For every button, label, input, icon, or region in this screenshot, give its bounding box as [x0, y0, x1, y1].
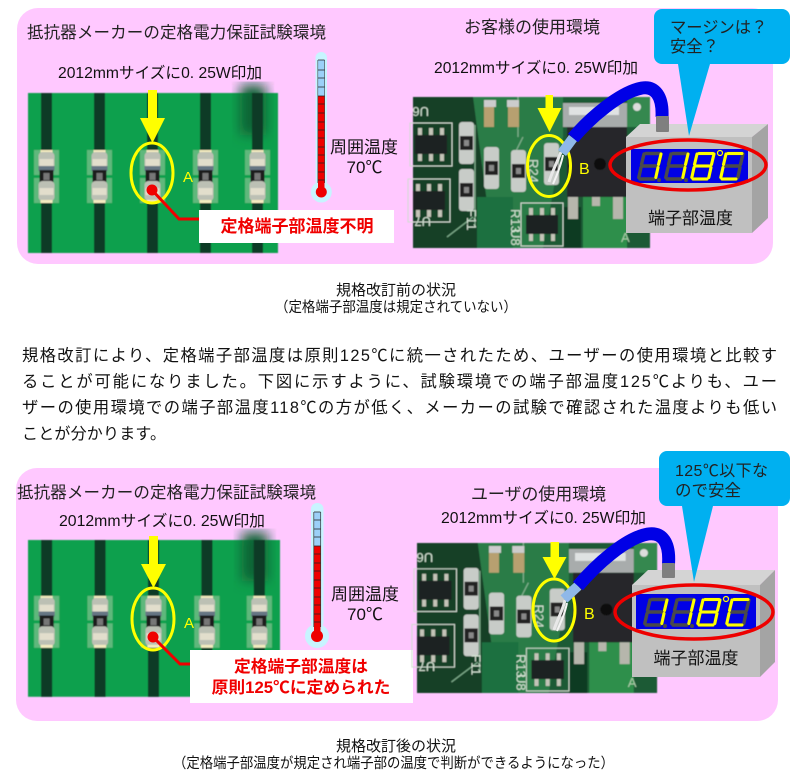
- label: terminal temperature: 端子部温度: [654, 649, 738, 668]
- leader: red terminal marker: [148, 632, 192, 664]
- caption: after revision: （定格端子部温度が規定され端子部の温度で判断ができるようになった）: [173, 755, 614, 772]
- seven-segment readout: [639, 150, 743, 182]
- caption: after revision: [173, 738, 614, 772]
- caption: before revision: 規格改訂前の状況: [336, 282, 456, 299]
- highlight: resistor B ellipse: [528, 136, 570, 196]
- callout: margin question: [654, 9, 790, 136]
- text block: explanation: ることが可能になりました。下図に示すように、試験環境での端子部温度125℃よりも、ユー: [22, 373, 777, 391]
- caption: before revision: [275, 282, 517, 316]
- photo: resistors on green board: [28, 85, 278, 253]
- arrow: yellow power arrow: [141, 536, 166, 588]
- caption: after revision: 規格改訂後の状況: [336, 738, 456, 755]
- highlight: resistor A ellipse: [131, 143, 173, 203]
- callout: rated terminal temperature: 定格端子部温度は: [234, 657, 368, 676]
- caption: before revision: （定格端子部温度は規定されていない）: [275, 299, 517, 316]
- callout: rated terminal temperature: 原則125℃に定められた: [212, 678, 390, 697]
- panel: after revision: [16, 468, 778, 721]
- text: applied power condition: 2012mmサイズに0. 25W印加: [441, 509, 646, 527]
- probe: blue sensor cable: [554, 534, 675, 631]
- seven-segment readout: [645, 596, 749, 628]
- callout: safe below 125 degrees: ので安全: [675, 481, 741, 500]
- label: B: B: [584, 606, 595, 623]
- measurement device: [615, 570, 775, 677]
- photo: dense circuit board: [412, 543, 657, 693]
- callout: safe below 125 degrees: 125℃以下な: [675, 462, 768, 480]
- label: B: B: [579, 161, 590, 178]
- callout: margin question: マージンは？: [670, 19, 767, 37]
- highlight: resistor A ellipse: [132, 588, 174, 650]
- heading: customer environment: お客様の使用環境: [464, 17, 600, 37]
- panel: before revision: [17, 8, 773, 264]
- arrow: yellow power arrow: [140, 90, 165, 143]
- text block: explanation: 規格改訂により、定格端子部温度は原則125℃に統一されたため、ユーザーの使用環境と比較す: [22, 347, 777, 365]
- label: terminal temperature: 端子部温度: [648, 209, 733, 228]
- leader: red terminal marker: [146, 184, 199, 219]
- text block: explanation: ことが分かります。: [22, 425, 166, 443]
- highlight: resistor B ellipse: [533, 579, 575, 641]
- label: ambient temperature: 周囲温度: [330, 138, 398, 157]
- probe: blue sensor cable: [549, 88, 669, 184]
- highlight: readout ellipse: [610, 140, 766, 190]
- callout: terminal temperature unknown: 定格端子部温度不明: [220, 217, 374, 236]
- arrow: yellow power arrow: [538, 95, 562, 132]
- callout: terminal temperature unknown: [199, 210, 394, 243]
- text: applied power condition: 2012mmサイズに0. 25W印加: [434, 59, 638, 77]
- callout: safe below 125 degrees: [659, 451, 790, 582]
- highlight: readout ellipse: [615, 585, 773, 639]
- photo: dense circuit board: [408, 97, 650, 248]
- heading: user environment: ユーザの使用環境: [471, 484, 606, 504]
- label: A: A: [184, 615, 194, 632]
- measurement device: [610, 124, 768, 233]
- label: A: A: [183, 169, 193, 186]
- arrow: yellow power arrow: [542, 542, 566, 579]
- label: ambient temperature: [331, 585, 399, 624]
- callout: rated terminal temperature: [190, 650, 413, 703]
- callout: margin question: 安全？: [670, 38, 719, 56]
- icon: thermometer: [311, 52, 332, 202]
- label: ambient temperature: 70℃: [347, 158, 382, 177]
- text block: explanation: ザーの使用環境での端子部温度118℃の方が低く、メーカーの試験で確認された温度よりも低い: [22, 399, 777, 417]
- text block: explanation: [22, 347, 777, 443]
- icon: thermometer: [305, 503, 329, 648]
- label: ambient temperature: [330, 138, 398, 177]
- heading: manufacturer test environment: 抵抗器メーカーの定格電力保証試験環境: [27, 23, 326, 42]
- photo: resistors on green board: [28, 532, 280, 697]
- text: applied power condition: 2012mmサイズに0. 25W印加: [59, 512, 265, 530]
- label: ambient temperature: 周囲温度: [331, 585, 399, 604]
- heading: manufacturer test environment: 抵抗器メーカーの定格電力保証試験環境: [17, 483, 316, 502]
- label: ambient temperature: 70℃: [347, 605, 383, 624]
- text: applied power condition: 2012mmサイズに0. 25W印加: [58, 64, 262, 82]
